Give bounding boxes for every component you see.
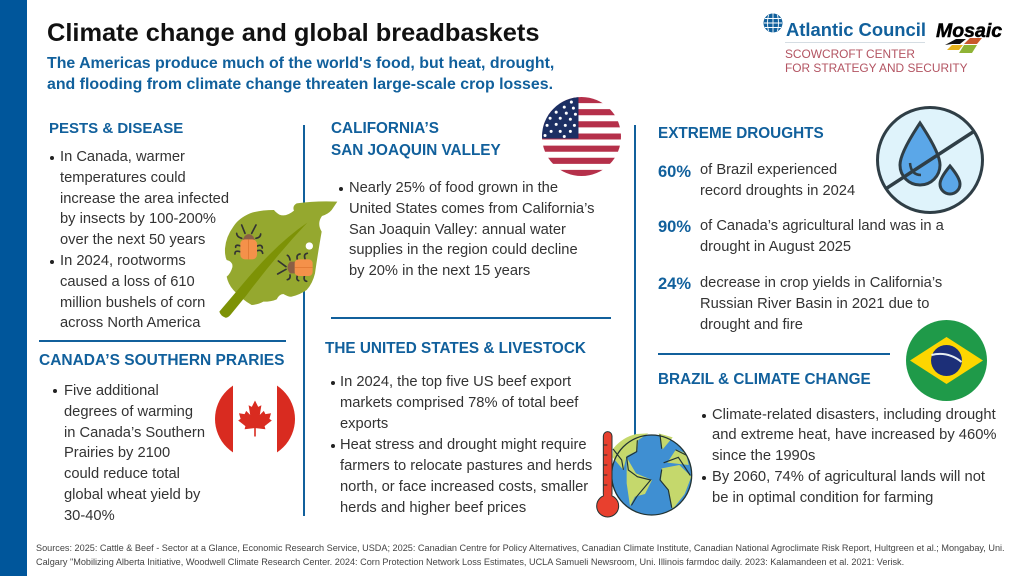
text (700, 162, 855, 199)
text: Canada's southern prairies: degrees of warming (64, 404, 193, 420)
bullet text: and extreme heat, have increased by 460% (712, 427, 997, 443)
stat: 90 percent (658, 218, 944, 255)
panel: United States and livestock (325, 340, 592, 516)
icon: US flag (542, 97, 621, 176)
icon: leaf with beetles (219, 201, 338, 318)
Scowcroft Center text: SCOWCROFT CENTER (785, 47, 915, 61)
text: drought and fire (700, 317, 803, 333)
panel: Brazil and climate change (658, 371, 997, 506)
logo: Atlantic Council (764, 14, 968, 74)
bullet text: Heat stress and drought might require (340, 436, 587, 452)
vertical rule right (634, 125, 636, 435)
bullet text: San Joaquin Valley: annual water (349, 222, 566, 238)
divider line: droughts and Brazil (658, 353, 890, 355)
text: Canada's southern prairies: in Canada’s Southern (64, 425, 205, 441)
bullet text: over the next 50 years (60, 232, 205, 248)
text: record droughts in 2024 (700, 183, 855, 199)
text: Canada's southern prairies: Five additional (64, 383, 159, 399)
bullet text: By 2060, 74% of agricultural lands will not (712, 469, 985, 485)
text (700, 218, 944, 255)
text: Canada's southern prairies: global wheat yield by (64, 487, 200, 503)
wordmark: Mosaic (936, 20, 1002, 42)
text: of Brazil experienced (700, 162, 837, 178)
number: 90% (658, 218, 691, 236)
bullet text: caused a loss of 610 (60, 274, 195, 290)
heading: PESTS & DISEASE (49, 120, 183, 137)
left blue band (0, 0, 27, 576)
sources (36, 543, 1005, 567)
bullet text: In Canada, warmer (60, 149, 185, 165)
bullet text: supplies in the region could decline (349, 242, 578, 258)
heading (331, 120, 501, 159)
text: Russian River Basin in 2021 due to (700, 296, 929, 312)
bullet text (339, 180, 594, 279)
bullet text: herds and higher beef prices (340, 500, 526, 516)
divider line: pests and prairies (39, 340, 286, 342)
panel: extreme droughts (658, 125, 944, 333)
icon: globe with thermometer (596, 431, 692, 518)
divider line: California and livestock (331, 317, 611, 319)
heading: CALIFORNIA’S (331, 120, 439, 137)
subtitle: and flooding from climate change threaten large-scale crop losses. (47, 76, 553, 92)
bullet text: north, or face increased costs, smaller (340, 478, 588, 494)
Scowcroft Center text: FOR STRATEGY AND SECURITY (785, 60, 968, 74)
bullet text (702, 406, 997, 506)
Scowcroft Center text (785, 47, 968, 74)
panel: California's San Joaquin Valley (331, 120, 594, 279)
bullet text: farmers to relocate pastures and herds (340, 458, 592, 474)
text: drought in August 2025 (700, 239, 851, 255)
bullet text: Nearly 25% of food grown in the (349, 180, 558, 196)
text: Canada's southern prairies: 30-40% (64, 508, 115, 524)
bullet text: In 2024, the top five US beef export (340, 374, 571, 390)
bullet text: be in optimal condition for farming (712, 490, 933, 506)
text: Canada's southern prairies: Prairies by 2100 (64, 445, 170, 461)
stat: 60 percent (658, 162, 855, 199)
bullet text: markets comprised 78% of total beef (340, 394, 578, 410)
bullet text (50, 149, 229, 331)
number: 60% (658, 163, 691, 181)
bullet text: increase the area infected (60, 191, 229, 207)
icon: Brazil flag (906, 320, 987, 401)
icon: Canada flag (215, 386, 295, 452)
icon: no water drops (876, 106, 984, 214)
bullet text: United States comes from California’s (349, 201, 594, 217)
bullet text (331, 374, 592, 516)
heading: BRAZIL & CLIMATE CHANGE (658, 371, 871, 388)
bullet text: by insects by 100-200% (60, 211, 216, 227)
icon: Atlantic Council globe (764, 14, 782, 32)
logo: Mosaic (936, 20, 1002, 53)
panel: pests and disease (49, 120, 229, 331)
vertical rule left (303, 125, 305, 516)
heading: THE UNITED STATES & LIVESTOCK (325, 340, 586, 357)
number: 24% (658, 275, 691, 293)
bullet text: Climate-related disasters, including drought (712, 406, 996, 422)
heading: EXTREME DROUGHTS (658, 125, 824, 142)
sources: Calgary "Mobilizing Alberta Initiative, Woodwell Climate Research Center. 2024: Corn Protection Network Loss Estimates, UCLA Samueli Newsroom, Uni. Illinois farmdoc daily. 2023: Kalamandeen et al. 2021: Verisk. (36, 557, 904, 567)
heading: SAN JOAQUIN VALLEY (331, 142, 501, 159)
text: Canada's southern prairies: could reduce total (64, 466, 180, 482)
icon: Mosaic tiles (945, 38, 982, 53)
sources: Sources: 2025: Cattle & Beef - Sector at a Glance, Economic Research Service, USDA; 2025: Canadian Centre for Policy Alternatives, Canadian Climate Institute, Canadian National Agroclimate Risk Report, Hultgreen et al.; Mongabay, Uni. (36, 543, 1005, 553)
subtitle: The Americas produce much of the world's food, but heat, drought, (47, 55, 554, 72)
wordmark: Atlantic Council (786, 19, 926, 40)
bullet text: by 20% in the next 15 years (349, 263, 530, 279)
text (700, 275, 942, 333)
subtitle (47, 55, 554, 92)
bullet text: across North America (60, 315, 200, 331)
bullet text: million bushels of corn (60, 295, 205, 311)
bullet text: since the 1990s (712, 448, 815, 464)
bullet text: exports (340, 416, 388, 432)
text: decrease in crop yields in California’s (700, 275, 942, 291)
stat: 24 percent (658, 275, 942, 333)
heading: Canada's southern prairies: CANADA’S SOUTHERN PRARIES (39, 352, 284, 369)
text: of Canada’s agricultural land was in a (700, 218, 944, 234)
text: Canada's southern prairies (53, 383, 205, 524)
bullet text: temperatures could (60, 170, 186, 186)
title: Climate change and global breadbaskets (47, 19, 539, 47)
bullet text: In 2024, rootworms (60, 253, 186, 269)
